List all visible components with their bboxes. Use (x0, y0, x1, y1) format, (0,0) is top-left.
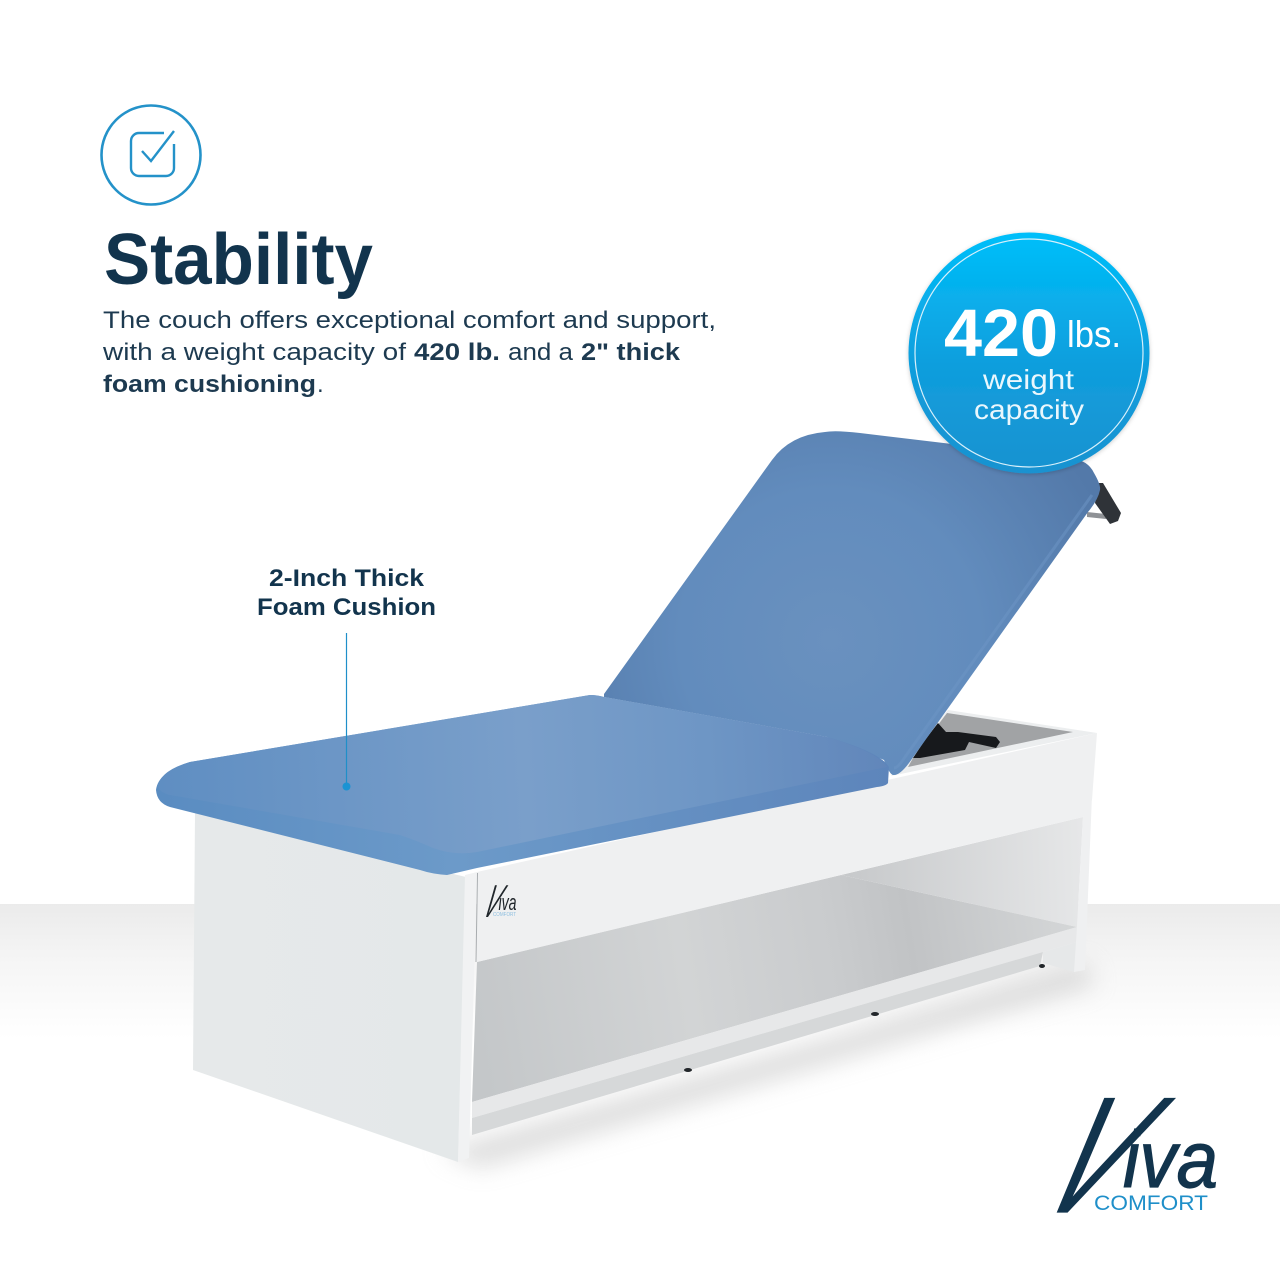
shelf interior (472, 875, 1077, 1102)
callout label: 2-Inch Thick (269, 565, 425, 592)
description text: 2" thick (581, 339, 681, 366)
end panel front edge (458, 872, 477, 1162)
callout label (257, 565, 436, 621)
callout label: Foam Cushion (257, 594, 436, 621)
description text: The couch offers exceptional comfort and support, (103, 307, 716, 334)
couch product illustration (156, 431, 1121, 1162)
description text: foam cushioning (103, 371, 316, 398)
mechanism handle (913, 723, 1000, 758)
feet (684, 964, 1045, 1072)
backrest cushion (604, 431, 1100, 775)
floor shadow (440, 962, 1095, 1168)
small logo on fascia: iva (498, 891, 517, 916)
callout: foam cushion (257, 565, 436, 790)
brand logo: COMFORT (1094, 1192, 1208, 1215)
badge: weight capacity: lbs. (1067, 314, 1121, 355)
right inner wall (841, 817, 1083, 927)
shelf front strip (472, 927, 1077, 1118)
small logo on fascia: COMFORT (493, 912, 517, 918)
brand logo: V (1013, 1063, 1195, 1247)
description text: 420 lb. (414, 339, 500, 366)
shelf lower strip (472, 952, 1043, 1135)
description text (102, 307, 716, 398)
front fascia (477, 733, 1097, 962)
bracket behind backrest (1087, 483, 1121, 524)
floor backdrop (0, 904, 1280, 1039)
rear compartment (891, 710, 1097, 776)
seat top surface (158, 695, 887, 853)
seat cushion (156, 695, 889, 875)
small logo on fascia: V (477, 877, 512, 928)
brand logo: iva (1123, 1115, 1218, 1204)
description text: and a (508, 339, 574, 366)
left end panel (193, 813, 466, 1162)
heading: Stability (104, 220, 373, 300)
badge: weight capacity: weight (982, 364, 1074, 395)
callout leader line (342, 633, 350, 790)
description text: with a weight capacity of (102, 339, 406, 366)
description text: . (317, 371, 324, 398)
right end strip (1074, 795, 1092, 972)
right foot panel (1043, 942, 1077, 972)
badge: weight capacity (908, 232, 1150, 474)
edge line (476, 873, 478, 962)
badge: weight capacity: 420 (944, 296, 1058, 371)
icon: checkbox in circle (102, 106, 200, 204)
backrest edge highlight (894, 495, 1092, 768)
badge: weight capacity: capacity (974, 394, 1084, 425)
